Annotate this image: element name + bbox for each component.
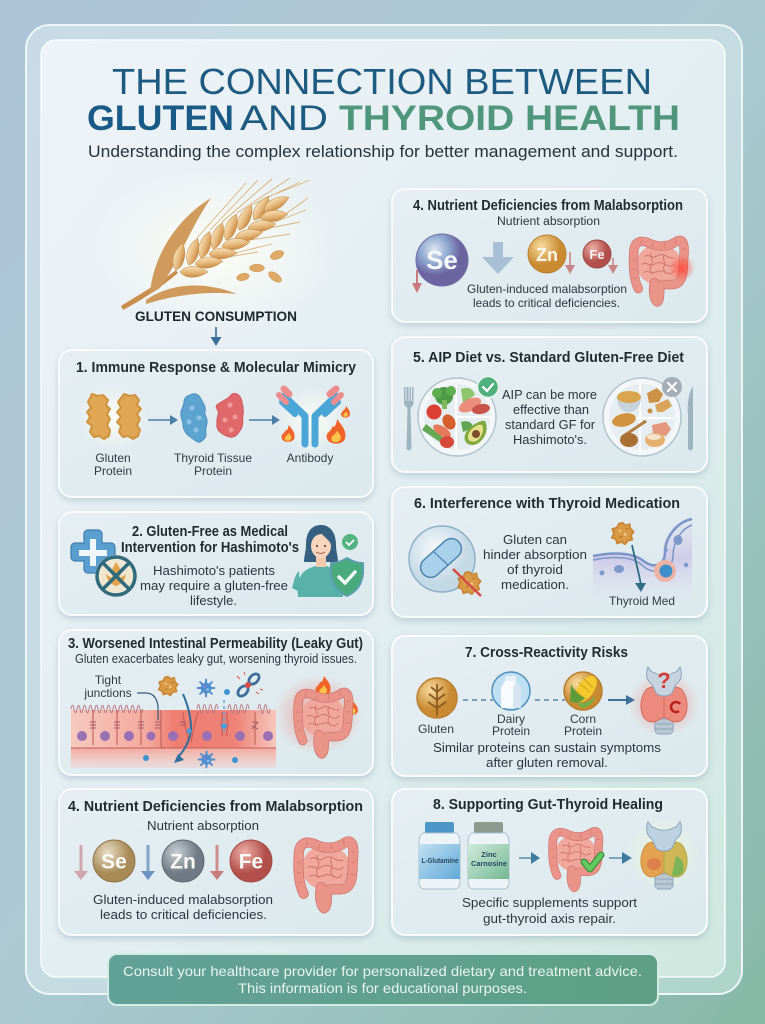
arrow — [609, 852, 632, 864]
icon: Fe coin — [583, 240, 618, 274]
icon: x badge — [662, 377, 682, 397]
subheading: Nutrient absorption — [497, 216, 600, 228]
panel: 2 gluten-free intervention — [59, 512, 373, 615]
icon: gluten protein — [77, 386, 149, 450]
label: gluten: Gluten — [418, 722, 454, 736]
icon: Se coin: Se — [101, 850, 127, 874]
body text: leads to critical deficiencies. — [100, 908, 267, 922]
body text: gut-thyroid axis repair. — [483, 911, 616, 926]
heading 3: 3. Worsened Intestinal Permeability (Leaky Gut) — [68, 636, 363, 652]
body text: medication. — [501, 577, 569, 592]
icon: Se sphere — [412, 234, 468, 293]
icon: thyroid question: ? — [657, 668, 671, 693]
heading 4: 4. Nutrient Deficiencies from Malabsorption — [68, 799, 363, 815]
arrow: consumption to immune response — [210, 327, 222, 346]
icon: medical cross — [71, 530, 115, 573]
label: corn protein — [564, 712, 602, 738]
callout: footer disclaimer: This information is for educational purposes. — [238, 980, 527, 996]
body text: AIP can be more — [502, 387, 597, 402]
body text — [140, 564, 288, 608]
icon: gluten particle — [159, 677, 178, 695]
icon: Zinc Carnosine bottle — [468, 822, 509, 889]
subheading 3: Gluten exacerbates leaky gut, worsening thyroid issues. — [75, 652, 357, 666]
body text: may require a gluten-free — [140, 579, 288, 593]
body text: effective than — [513, 402, 589, 417]
heading 2 line 2: Intervention for Hashimoto's — [121, 540, 299, 556]
icon: pill blocked — [409, 526, 481, 596]
icon: gluten particle — [612, 523, 634, 544]
icon: Zinc Carnosine bottle: Zinc — [481, 850, 497, 859]
icon: gluten circle — [417, 678, 457, 718]
icon: fork — [404, 387, 414, 450]
heading 8: 8. Supporting Gut-Thyroid Healing — [433, 797, 663, 813]
icon: shield — [331, 558, 363, 596]
icon: gut with red spot — [632, 239, 695, 302]
body text — [462, 895, 637, 926]
icon: Fe coin — [230, 840, 272, 882]
body text — [502, 387, 597, 447]
icon: Se coin — [93, 840, 135, 882]
heading: 4. Nutrient Deficiencies from Malabsorption — [413, 198, 683, 214]
icon: thyroid tissue protein — [181, 394, 243, 442]
diagram: cell absorption — [593, 517, 692, 600]
panel: 4 nutrient deficiencies right — [392, 189, 707, 322]
body text: leads to critical deficiencies. — [473, 296, 620, 310]
body text: Hashimoto's patients — [153, 564, 275, 578]
arrow: big down — [482, 242, 514, 274]
icon: healthy thyroid — [627, 819, 699, 891]
icon: healthy plate — [418, 378, 496, 456]
connector — [535, 699, 565, 701]
label: thyroid med: Thyroid Med — [609, 594, 675, 608]
label: gluten consumption: GLUTEN CONSUMPTION — [135, 308, 297, 324]
icon: gut — [297, 840, 355, 908]
panel: 7 cross reactivity — [392, 636, 707, 776]
icon: cross highlight — [79, 539, 107, 566]
body text: of thyroid — [507, 562, 563, 577]
label: thyroid tissue protein: Thyroid Tissue — [174, 451, 252, 465]
label: dairy protein: Protein — [492, 724, 530, 738]
leaking particles and arrow — [143, 689, 238, 767]
body text — [467, 282, 627, 310]
icon: Fe coin: Fe — [589, 247, 605, 262]
panel: 8 supporting healing — [392, 789, 707, 935]
body text: Hashimoto's. — [513, 432, 587, 447]
arrow — [148, 415, 178, 425]
arrows down — [74, 845, 224, 880]
icon: Zinc Carnosine bottle: Carnosine — [471, 861, 507, 868]
body text — [433, 740, 662, 770]
icon: woman — [292, 525, 343, 597]
icon: L-Glutamine bottle: L-Glutamine — [422, 858, 459, 865]
title: GLUTEN — [87, 99, 234, 138]
icon: check badge — [342, 534, 358, 550]
body text: lifestyle. — [190, 594, 237, 608]
label: tight junctions — [83, 673, 132, 700]
subheading: Nutrient absorption — [147, 819, 259, 833]
heading 2: 2. Gluten-Free as Medical — [132, 524, 288, 540]
icon: Zn coin: Zn — [536, 245, 558, 265]
label: gluten protein — [94, 451, 132, 478]
icon: wheat — [90, 165, 340, 335]
heading 1: 1. Immune Response & Molecular Mimicry — [76, 360, 356, 376]
title: THE CONNECTION BETWEEN — [112, 61, 652, 102]
connector — [463, 699, 493, 701]
label: tight junctions: Tight — [95, 673, 122, 687]
callout: footer disclaimer: Consult your healthcare provider for personalized dietary and treatment advice. — [123, 963, 642, 979]
callout: footer disclaimer — [108, 954, 658, 1005]
label: thyroid tissue protein: Protein — [194, 464, 232, 478]
arrow — [608, 695, 635, 705]
icon: Se sphere: Se — [426, 245, 458, 275]
panel: 1 immune response — [59, 350, 373, 497]
label: gluten protein: Protein — [94, 464, 132, 478]
body text: Similar proteins can sustain symptoms — [433, 740, 662, 755]
icon: Zn coin — [162, 840, 204, 882]
label: thyroid tissue protein — [174, 451, 252, 478]
icon: check badge — [478, 376, 498, 398]
panel: 6 thyroid medication — [392, 487, 707, 617]
body text — [93, 893, 273, 922]
icon: standard plate — [603, 378, 681, 456]
icon: broken chain — [236, 672, 263, 698]
label: dairy protein — [492, 712, 530, 738]
heading 7: 7. Cross-Reactivity Risks — [465, 645, 628, 661]
icon: L-Glutamine bottle — [419, 822, 460, 889]
icon: knife — [688, 386, 693, 450]
icon: Zn coin: Zn — [170, 850, 196, 874]
icon: blue particle — [198, 680, 214, 696]
icon: thyroid question — [628, 667, 700, 736]
icon: healing gut — [551, 830, 601, 888]
panel: 4 nutrient deficiencies left — [59, 789, 373, 935]
icon: corn circle — [564, 672, 602, 710]
icon: dairy circle — [492, 672, 530, 710]
body text: Gluten can — [503, 532, 567, 547]
body text — [483, 532, 587, 592]
icon: Fe coin: Fe — [239, 850, 263, 874]
body text: hinder absorption — [483, 547, 587, 562]
heading 6: 6. Interference with Thyroid Medication — [414, 496, 680, 512]
title: THYROID HEALTH — [339, 99, 680, 138]
label: corn protein: Corn — [570, 712, 596, 726]
label: gluten protein: Gluten — [95, 451, 131, 465]
arrow — [519, 852, 540, 864]
title: AND — [240, 99, 328, 138]
panel: 3 leaky gut — [59, 630, 373, 775]
panel: 5 AIP diet — [392, 337, 707, 472]
icon: inflamed gut — [274, 675, 362, 755]
diagram: intestinal lining — [71, 704, 276, 768]
arrow — [249, 415, 280, 425]
label: antibody: Antibody — [287, 451, 333, 465]
icon: antibody — [276, 386, 350, 454]
label: dairy protein: Dairy — [497, 712, 525, 726]
body text: after gluten removal. — [486, 755, 608, 770]
title — [87, 61, 680, 138]
body text: Gluten-induced malabsorption — [93, 893, 273, 907]
icon: Zn coin — [528, 235, 575, 274]
connector: tight junctions — [137, 693, 158, 706]
subtitle: Understanding the complex relationship for better management and support. — [88, 143, 678, 161]
heading 5: 5. AIP Diet vs. Standard Gluten-Free Diet — [413, 350, 684, 366]
label: corn protein: Protein — [564, 724, 602, 738]
body text: standard GF for — [505, 417, 596, 432]
body text: Gluten-induced malabsorption — [467, 282, 627, 296]
label: tight junctions: junctions — [83, 686, 132, 700]
body text: Specific supplements support — [462, 895, 637, 910]
icon: no wheat — [95, 555, 137, 597]
